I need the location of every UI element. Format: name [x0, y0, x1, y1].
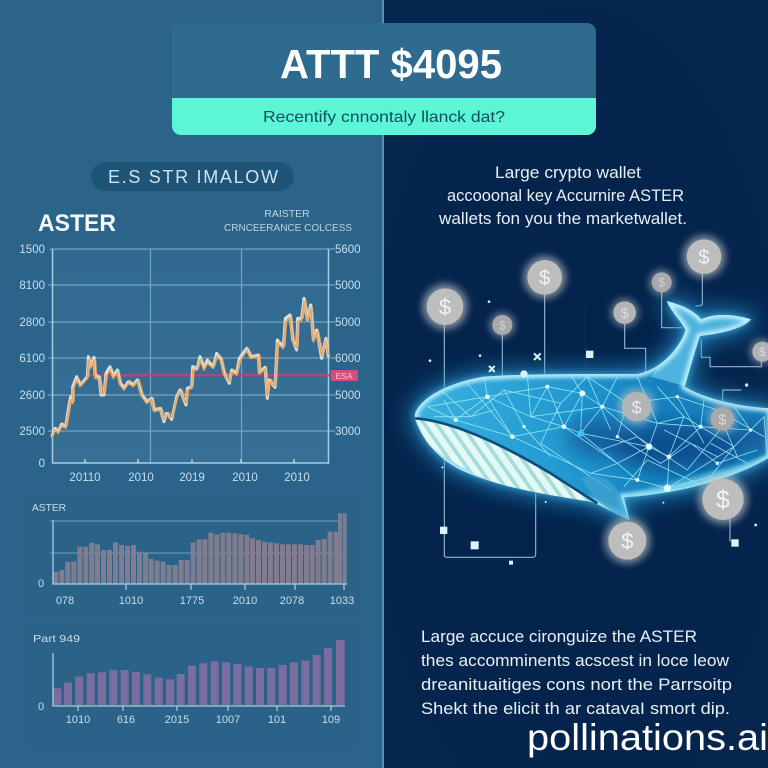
coin 7: [750, 339, 768, 364]
bar chart axis labels: 101: [268, 714, 286, 726]
coin 3: $: [539, 268, 550, 290]
subtitle strip: [172, 98, 596, 135]
description text block: Large accuce cironguize the ASTER: [421, 628, 697, 646]
whale body: [411, 297, 768, 523]
chart title: ASTER: [38, 210, 116, 237]
plot area: [52, 249, 328, 463]
right panel background: [384, 0, 768, 768]
coin 9: $: [718, 412, 726, 428]
belly highlight: [617, 457, 768, 523]
coin 4: [611, 299, 639, 327]
section heading pill: [91, 162, 294, 191]
left axis labels: 8100: [19, 280, 45, 292]
title banner: [172, 23, 596, 135]
line chart panel: [19, 208, 361, 484]
description text block: [421, 628, 732, 718]
chart legend: [224, 208, 352, 234]
coin 10: $: [716, 487, 730, 514]
x axis labels: 2010: [128, 472, 154, 484]
bar chart axis labels: 0: [38, 701, 44, 713]
coin 4: $: [621, 306, 629, 322]
left axis labels: 2500: [19, 426, 45, 438]
bar chart axis labels: 2015: [165, 714, 189, 726]
bar chart axis labels: [38, 701, 340, 726]
coin 11: [604, 518, 650, 564]
left axis labels: 0: [39, 458, 45, 470]
intro text block: accooonal key Accurnire ASTER: [447, 187, 684, 205]
coin 7: $: [759, 345, 766, 359]
right axis labels: 5000: [335, 390, 361, 402]
x axis labels: 20110: [69, 472, 101, 484]
intro text block: wallets fon you the marketwallet.: [438, 210, 687, 228]
right axis labels: [335, 244, 361, 438]
bar chart axis labels: 0: [38, 578, 44, 590]
bar chart label: ASTER: [32, 502, 66, 514]
sparkle markers: [429, 300, 757, 565]
coin 6: [683, 235, 725, 278]
coins: [422, 235, 768, 564]
intro text block: Large crypto wallet: [495, 164, 641, 182]
right axis labels: 5600: [335, 244, 361, 256]
coin 5: $: [658, 276, 665, 290]
x axis labels: 2010: [284, 472, 310, 484]
x axis labels: [69, 472, 310, 484]
coin 2: $: [499, 318, 506, 332]
bar chart panel: Part 949: [25, 624, 360, 748]
bar chart axis labels: 616: [117, 714, 135, 726]
right axis labels: 5000: [335, 280, 361, 292]
description text block: dreanituaitiges cons nort the Parrsoitp: [421, 676, 732, 694]
description text block: Shekt the elicit th ar catavaI smort dip.: [421, 700, 730, 718]
coin 2: [490, 312, 515, 338]
coin 11: $: [621, 529, 633, 554]
right axis labels: 3000: [335, 426, 361, 438]
pectoral fin: [581, 476, 629, 520]
x axis labels: 2010: [232, 472, 258, 484]
coin 1: $: [439, 295, 451, 320]
title text: ATTT $4095: [280, 41, 502, 87]
dark mesh patches: [567, 417, 768, 470]
bar chart axis labels: 1033: [330, 595, 354, 607]
coin 10: [698, 475, 748, 524]
bars: [53, 513, 347, 584]
bar chart axis labels: 109: [322, 714, 340, 726]
bar chart axis labels: [38, 578, 354, 607]
bars: [53, 640, 345, 705]
subtitle strip: Recentify cnnontaly llanck dat?: [263, 109, 505, 126]
left axis labels: [19, 244, 45, 470]
bar chart axis labels: 078: [56, 595, 74, 607]
left panel background: [0, 0, 384, 768]
coin 3: [523, 256, 566, 299]
whale outer glow: [415, 301, 768, 520]
description text block: thes accomminents acscest in loce leow: [421, 652, 729, 670]
chart legend: CRNCEERANCE COLCESS: [224, 222, 352, 234]
left axis labels: 6100: [19, 353, 45, 365]
left axis labels: 2600: [19, 390, 45, 402]
bar chart axis labels: 1010: [119, 595, 143, 607]
left axis labels: 1500: [19, 244, 45, 256]
reference line with label: ESA: [335, 371, 353, 381]
network mesh: [427, 375, 767, 490]
right axis labels: 6000: [335, 353, 361, 365]
price line: [52, 298, 328, 438]
bar chart axis labels: 1007: [216, 714, 240, 726]
right axis labels: 5000: [335, 317, 361, 329]
bar chart axis labels: 1010: [66, 714, 90, 726]
coin 8: $: [632, 397, 642, 417]
intro text block: [438, 164, 687, 228]
coin 1: [422, 284, 468, 329]
bar chart label: Part 949: [33, 633, 80, 645]
connector lines: [444, 273, 761, 557]
chart legend: RAISTER: [264, 208, 310, 220]
bar chart axis labels: 2010: [233, 595, 257, 607]
left axis labels: 2800: [19, 317, 45, 329]
section heading pill: E.S STR IMALOW: [108, 167, 278, 187]
coin 6: $: [698, 247, 710, 269]
coin 5: [649, 270, 674, 295]
bright rim: [415, 301, 768, 520]
reference line with label: [85, 370, 358, 381]
bar chart panel: ASTER: [25, 494, 360, 616]
x axis labels: 2019: [179, 472, 205, 484]
tail highlight: [651, 298, 754, 388]
coin 9: [708, 405, 737, 433]
network nodes: [454, 385, 752, 492]
whale illustration: [411, 235, 768, 565]
baleen stripes: [416, 418, 597, 503]
coin 8: [619, 389, 655, 425]
bar chart axis labels: 1775: [180, 595, 204, 607]
bar chart axis labels: 2078: [280, 595, 304, 607]
watermark: pollinations.ai: [527, 717, 768, 758]
